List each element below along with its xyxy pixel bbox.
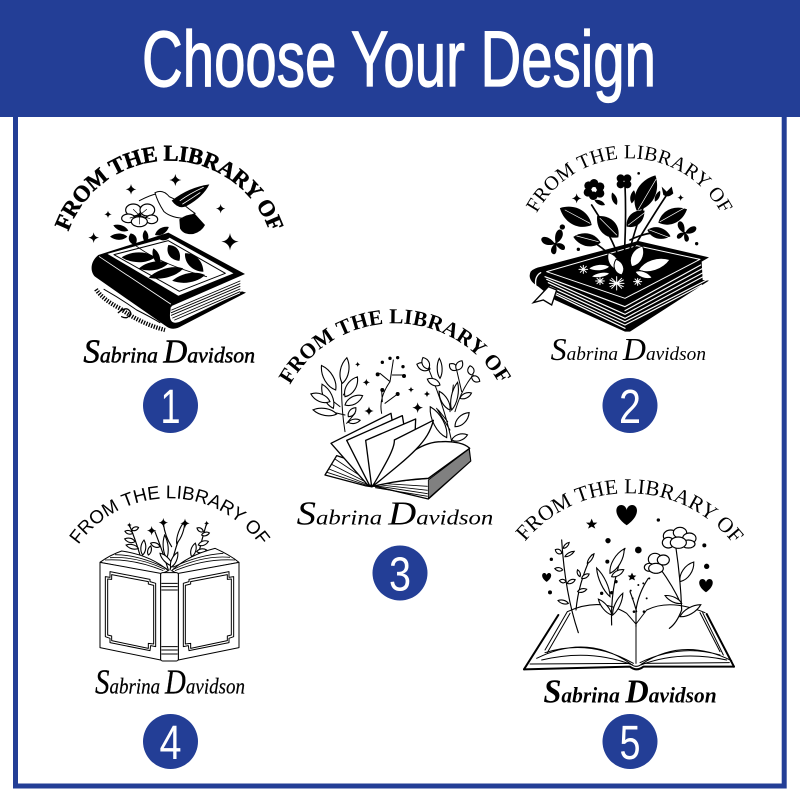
design 1 hummingbird <box>139 184 209 234</box>
badge 4 <box>143 714 198 770</box>
badge 5: 5 <box>620 717 640 770</box>
badge 2: 2 <box>619 381 641 434</box>
design 1: hummingbird book <box>54 145 284 371</box>
design 3 plants <box>309 356 481 443</box>
design 2 cover flowers <box>579 265 642 290</box>
badge 4: 4 <box>160 717 182 770</box>
badge 1 <box>143 378 198 434</box>
design 4: upright open book <box>69 486 270 701</box>
design 5 arc heading: FROM THE LIBRARY OF <box>515 479 744 542</box>
design 1 flower <box>122 204 158 227</box>
design 1 book <box>92 233 246 329</box>
badge 3 <box>372 546 428 602</box>
design 5 flowers <box>554 527 702 633</box>
design 2 butterflies <box>540 221 697 257</box>
design 5: wildflower open book <box>515 479 744 730</box>
design 2 arc heading: FROM THE LIBRARY OF <box>526 145 733 213</box>
design 1 bird and plant leaves <box>110 223 207 285</box>
design 2 flowers <box>560 172 698 251</box>
design 5 name: Sabrina Davidson <box>543 674 717 711</box>
design 4 plants <box>124 518 210 570</box>
design 1 stars <box>88 174 239 250</box>
badge 1: 1 <box>160 381 180 434</box>
design 2: plant book <box>526 145 733 367</box>
design 4 name: Sabrina Davidson <box>95 663 245 701</box>
design 5 open book <box>524 605 734 669</box>
design 2 plant <box>556 171 690 270</box>
design 3: fanned pages book <box>278 309 512 532</box>
badge 2 <box>602 378 658 434</box>
design 3 open book <box>325 413 471 499</box>
design 2 book <box>530 241 709 332</box>
design 1 name: Sabrina Davidson <box>83 334 255 371</box>
design 2 name: Sabrina Davidson <box>551 331 706 367</box>
design 4 arc heading: FROM THE LIBRARY OF <box>69 486 270 544</box>
design 3 name: Sabrina Davidson <box>297 495 493 532</box>
design 4 book covers <box>100 562 239 661</box>
badge 3: 3 <box>389 548 411 602</box>
design 1 ornament <box>96 289 165 330</box>
design 1 arc heading: FROM THE LIBRARY OF <box>54 145 284 232</box>
design 3 arc heading: FROM THE LIBRARY OF <box>278 309 512 384</box>
header band <box>0 0 800 117</box>
design 4 book pages <box>100 548 239 574</box>
badge 5 <box>602 714 658 770</box>
design 2 cover leaves <box>588 243 672 281</box>
design 5 decorations <box>542 505 713 594</box>
